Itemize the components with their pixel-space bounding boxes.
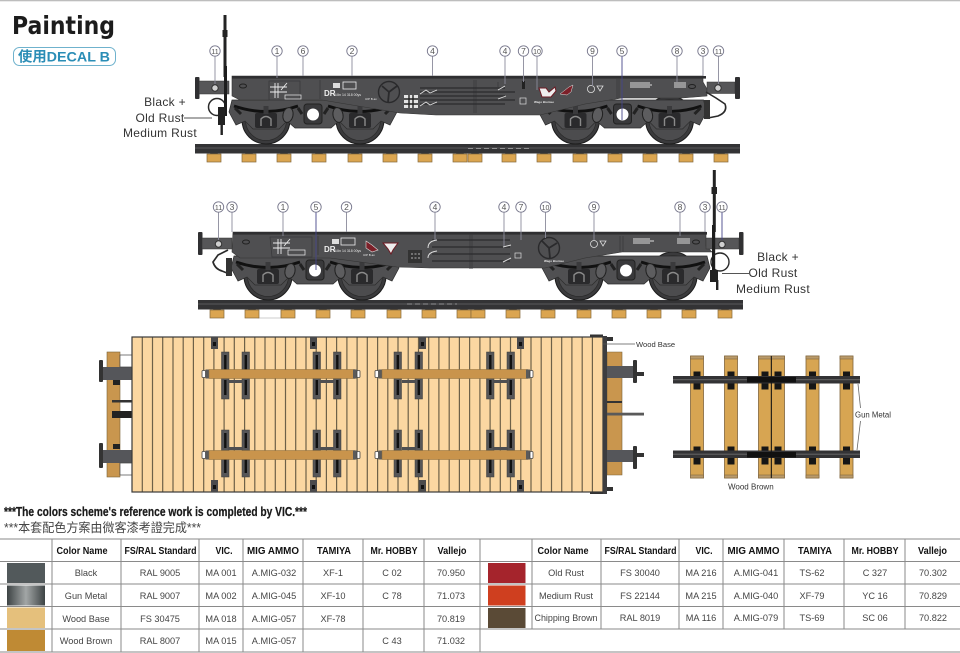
header: FS/RAL Standard (124, 546, 196, 557)
callouts: 10 (542, 205, 549, 212)
callouts: 11 (718, 205, 726, 212)
track 1 (195, 144, 740, 162)
markings: UIP B.ax (365, 97, 377, 101)
callouts: 5 (314, 202, 319, 212)
callouts: 3 (703, 202, 708, 212)
row: old rust (548, 568, 947, 578)
row: medium rust: A.MIG-040 (734, 591, 778, 601)
callouts: 9 (592, 202, 597, 212)
left end beam (107, 352, 120, 477)
row: old rust: 70.302 (919, 568, 947, 578)
row: chipping brown: 70.822 (919, 613, 947, 623)
buffers and hoses (198, 170, 744, 290)
callouts: 4 (503, 46, 508, 56)
row: chipping brown: SC 06 (862, 613, 888, 623)
right end beam (607, 352, 622, 475)
buffers and hoses (195, 15, 740, 135)
callouts: 4 (430, 46, 435, 56)
header: FS/RAL Standard (604, 546, 676, 557)
header: VIC. (696, 546, 713, 557)
paint label right: Old Rust (748, 266, 798, 280)
row: chipping brown: Chipping Brown (534, 613, 598, 623)
callouts: 10 (533, 49, 541, 56)
track 2 (198, 300, 743, 318)
header: VIC. (216, 546, 233, 557)
wood brown label: Wood Brown (728, 482, 774, 492)
right buffers (590, 334, 644, 494)
row: wood base: A.MIG-057 (252, 614, 296, 624)
callouts: 2 (350, 46, 355, 56)
callouts: 7 (519, 202, 524, 212)
row: wood base: Wood Base (62, 614, 110, 624)
row: old rust: MA 216 (685, 568, 717, 578)
row: black: C 02 (382, 568, 402, 578)
track top view (673, 356, 891, 492)
row: wood base: MA 018 (205, 614, 237, 624)
markings: DR (324, 89, 336, 98)
header: MIG AMMO (247, 546, 299, 557)
header (56, 546, 466, 557)
paint label right (722, 250, 810, 296)
markings (240, 79, 696, 113)
decal badge: 使用DECAL B (18, 48, 110, 64)
row: gun metal: XF-10 (320, 591, 346, 601)
markings: Wago Bremse (544, 259, 564, 263)
row: old rust: A.MIG-041 (734, 568, 778, 578)
row: chipping brown (534, 613, 947, 623)
row: gun metal (65, 591, 465, 601)
markings: Wago Bremse (534, 100, 554, 104)
row: black: A.MIG-032 (252, 568, 296, 578)
callouts: 11 (215, 205, 222, 212)
header: Mr. HOBBY (852, 546, 899, 557)
header: Vallejo (438, 546, 466, 557)
callouts (213, 202, 727, 270)
row: black: XF-1 (323, 568, 343, 578)
callouts: 5 (620, 46, 625, 56)
callouts: 3 (701, 46, 706, 56)
row: chipping brown: TS-69 (799, 613, 825, 623)
row: medium rust: FS 22144 (620, 591, 660, 601)
reference note chinese: ***本套配色方案由微客漆考證完成*** (4, 520, 201, 535)
row: old rust: FS 30040 (620, 568, 660, 578)
deck edge (232, 76, 706, 79)
row: wood base (62, 614, 465, 624)
callouts: 8 (678, 202, 683, 212)
title: Painting (12, 11, 115, 40)
left buffers (99, 355, 132, 475)
header: TAMIYA (317, 546, 351, 557)
trucks (231, 252, 710, 300)
callouts: 2 (344, 202, 349, 212)
paint label left (123, 95, 212, 140)
gun metal label: Gun Metal (855, 410, 891, 420)
row: wood base: XF-78 (320, 614, 346, 624)
row: black: RAL 9005 (140, 568, 180, 578)
stakes and brackets (211, 337, 524, 492)
sleepers (690, 356, 853, 478)
wagon side view 1 (195, 15, 740, 162)
swatches (7, 563, 45, 651)
header: TAMIYA (798, 546, 832, 557)
deck planks (132, 336, 607, 494)
row: chipping brown: RAL 8019 (620, 613, 660, 623)
row: black: 70.950 (437, 568, 465, 578)
trucks (229, 96, 706, 144)
row: old rust: C 327 (863, 568, 887, 578)
color table left (0, 539, 480, 652)
callouts: 8 (675, 46, 680, 56)
wagon top view (99, 334, 675, 494)
callouts: 4 (502, 202, 507, 212)
markings (242, 234, 700, 269)
row: medium rust: XF-79 (799, 591, 825, 601)
row: medium rust: YC 16 (862, 591, 888, 601)
row: black (75, 568, 465, 578)
color table right (480, 539, 960, 652)
callouts: 6 (301, 46, 306, 56)
row: wood base: 70.819 (437, 614, 465, 624)
header: Color Name (538, 546, 589, 557)
hull (232, 76, 707, 115)
row: gun metal: Gun Metal (65, 591, 107, 601)
deck edge (233, 232, 707, 235)
row: wood brown: RAL 8007 (140, 636, 180, 646)
row: gun metal: RAL 9007 (140, 591, 180, 601)
wood base label (603, 340, 675, 349)
row: wood brown: 71.032 (437, 636, 465, 646)
top rule (0, 0, 960, 1)
rails (673, 356, 860, 478)
row: medium rust: MA 215 (685, 591, 717, 601)
markings: DR (324, 245, 336, 254)
row: medium rust: 70.829 (919, 591, 947, 601)
wood beams (202, 370, 533, 460)
row: gun metal: MA 002 (205, 591, 237, 601)
callouts: 9 (590, 46, 595, 56)
hull (232, 232, 712, 268)
callouts: 11 (715, 49, 722, 56)
row: wood brown: Wood Brown (60, 636, 112, 646)
callouts (210, 46, 724, 120)
wagon side view 2 (198, 170, 744, 318)
row: chipping brown: MA 116 (686, 613, 716, 623)
row: black: Black (75, 568, 98, 578)
header: Vallejo (918, 546, 947, 557)
row: wood base: FS 30475 (140, 614, 180, 624)
paint label left: Black + (144, 95, 186, 109)
row: wood brown: MA 015 (205, 636, 237, 646)
markings: Köln 14 318 00ys (334, 93, 361, 97)
callouts: 1 (281, 202, 286, 212)
header: Color Name (56, 546, 108, 557)
row: gun metal: C 78 (382, 591, 402, 601)
row: black: MA 001 (205, 568, 237, 578)
row: gun metal: 71.073 (437, 591, 465, 601)
header: MIG AMMO (728, 546, 780, 557)
paint label right: Black + (757, 250, 799, 264)
paint label right: Medium Rust (736, 282, 810, 296)
callouts: 7 (521, 46, 526, 56)
markings: Köln 14 318 00ys (334, 249, 361, 253)
row: medium rust: Medium Rust (539, 591, 594, 601)
row: wood brown (60, 636, 465, 646)
row: medium rust (539, 591, 947, 601)
paint label left: Old Rust (135, 111, 185, 125)
row: old rust: Old Rust (548, 568, 584, 578)
header: Mr. HOBBY (370, 546, 418, 557)
wood base label: Wood Base (636, 340, 675, 349)
paint label left: Medium Rust (123, 126, 197, 140)
callouts: 4 (433, 202, 438, 212)
markings: UIP B.ax (363, 253, 375, 257)
callouts: 1 (275, 46, 280, 56)
callouts: 11 (211, 49, 219, 56)
row: gun metal: A.MIG-045 (252, 591, 296, 601)
gun metal label (855, 384, 891, 450)
swatches (488, 563, 526, 628)
grid (0, 539, 480, 652)
row: chipping brown: A.MIG-079 (734, 613, 778, 623)
row: old rust: TS-62 (799, 568, 825, 578)
grid (480, 539, 960, 652)
row: wood brown: A.MIG-057 (252, 636, 296, 646)
header (538, 546, 947, 557)
callouts: 3 (230, 202, 235, 212)
reference note english: ***The colors scheme's reference work is completed by VIC.*** (4, 504, 308, 519)
row: wood brown: C 43 (382, 636, 402, 646)
